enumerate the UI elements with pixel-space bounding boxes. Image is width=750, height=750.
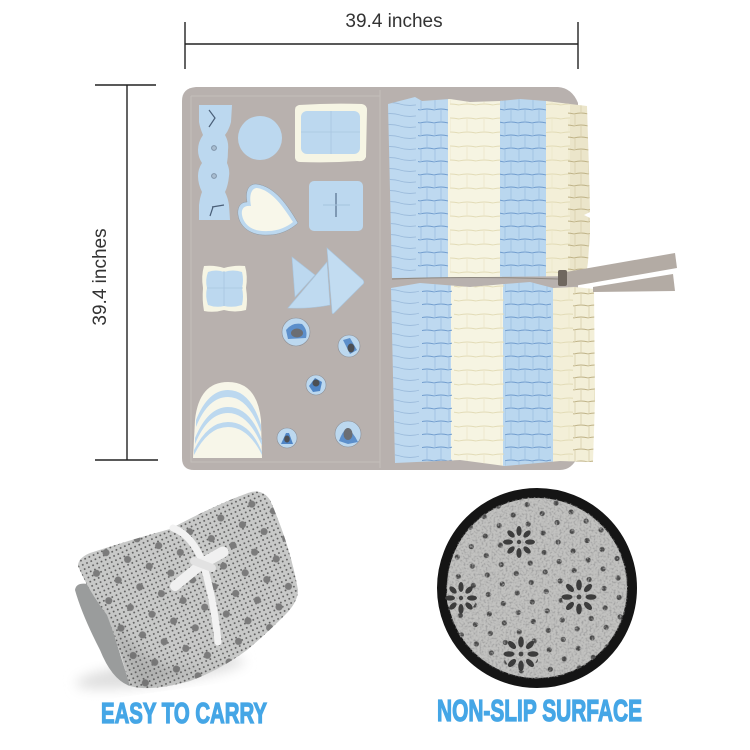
width label: 39.4 inches bbox=[345, 11, 443, 32]
caption: easy to carry: EASY TO CARRY bbox=[101, 698, 267, 730]
flower grip: top bbox=[503, 526, 535, 558]
hole rings bbox=[277, 318, 361, 448]
stitching bbox=[191, 90, 380, 468]
snuffle mat bbox=[182, 87, 677, 470]
top fringe bbox=[385, 95, 592, 280]
center seam shadow bbox=[392, 278, 558, 279]
blue square with slit bbox=[309, 181, 363, 231]
width arrow line bbox=[185, 22, 578, 69]
flower grip: right bbox=[562, 580, 596, 614]
cream rectangle with blue inset bbox=[295, 104, 367, 162]
ribbon and bow bbox=[173, 528, 223, 642]
dimension: height 39.4 inches bbox=[90, 85, 158, 460]
height arrow line bbox=[95, 85, 158, 460]
height label: 39.4 inches bbox=[90, 228, 111, 326]
roll body bbox=[78, 492, 298, 688]
flower grip: bottom bbox=[504, 636, 538, 672]
non-slip surface circle bbox=[442, 493, 632, 683]
texture and dots bbox=[446, 497, 628, 679]
circle base bbox=[442, 493, 632, 683]
dimension: width 39.4 inches bbox=[185, 11, 578, 69]
rolled mat photo bbox=[70, 485, 305, 696]
caption: non-slip surface: NON-SLIP SURFACE bbox=[437, 693, 642, 728]
heart shape bbox=[238, 184, 298, 235]
blue circle bbox=[238, 116, 282, 160]
tie straps bbox=[558, 253, 677, 292]
felt strip with slits bbox=[198, 105, 232, 220]
flower grip: left bbox=[445, 582, 477, 614]
triangle flaps bbox=[288, 248, 364, 314]
stacked arch flaps bbox=[193, 382, 262, 458]
fold underside bbox=[75, 584, 130, 686]
roll shadow bbox=[74, 648, 246, 696]
small cream quatrefoil bbox=[202, 266, 247, 312]
mat base bbox=[182, 87, 578, 470]
bottom fringe bbox=[388, 280, 597, 470]
